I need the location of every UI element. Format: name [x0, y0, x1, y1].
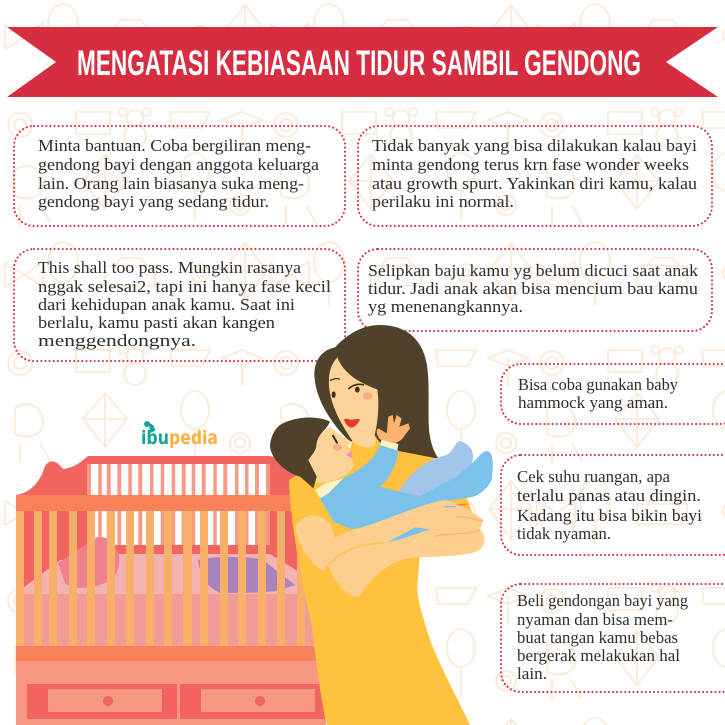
logo: ibupedia: pedia	[169, 427, 218, 449]
panel: suhu ruangan: terlalu panas atau dingin.	[517, 486, 701, 505]
logo: ibupedia: ibu	[141, 427, 169, 449]
panel: this shall too pass: dari kehidupan anak kamu. Saat ini	[38, 295, 295, 314]
baby face features	[333, 435, 352, 458]
drawer right	[180, 684, 325, 719]
panel: minta bantuan: Minta bantuan. Coba bergiliran meng-	[38, 136, 311, 155]
arm detail lines	[328, 504, 483, 565]
baby collar	[315, 478, 343, 498]
panel: suhu ruangan	[501, 455, 725, 555]
panel: selipkan baju: tidur. Jadi anak akan bisa mencium bau kamu	[368, 279, 698, 298]
drawer left	[27, 684, 177, 719]
panel: minta bantuan: gendong bayi dengan anggota keluarga	[38, 155, 320, 174]
front bars	[16, 511, 305, 646]
illustration: crib	[16, 456, 326, 725]
panel: baby hammock	[501, 364, 725, 424]
panel: this shall too pass: nggak selesai2, tapi ini hanya fase kecil	[38, 277, 331, 296]
white gap beside baby face	[325, 423, 352, 449]
baby hand	[377, 415, 410, 443]
baby face	[308, 427, 354, 483]
pillow	[58, 537, 119, 588]
baby cuff	[380, 439, 398, 450]
illustration: mother and baby	[270, 325, 493, 725]
baby hair	[270, 418, 330, 488]
panel: suhu ruangan: tidak nyaman.	[517, 524, 611, 543]
panel: this shall too pass	[14, 249, 345, 361]
panel: baby hammock: hammock yang aman.	[518, 393, 668, 412]
mother's lower arm	[328, 530, 485, 597]
panel: gendongan bayi	[501, 584, 725, 692]
panel: gendongan bayi: Beli gendongan bayi yang	[517, 591, 688, 610]
panel: minta bantuan: lain. Orang lain biasanya suka meng-	[38, 174, 304, 193]
mother's face features	[330, 379, 373, 428]
panel: wonder weeks	[358, 126, 712, 226]
panel: gendongan bayi: bergerak melakukan hal	[517, 646, 680, 665]
panel: minta bantuan	[14, 126, 345, 226]
sleeve under arm	[387, 527, 430, 543]
panel: selipkan baju	[358, 249, 712, 331]
panel: selipkan baju: yg menenangkannya.	[368, 297, 523, 316]
mattress	[23, 554, 317, 594]
panel: minta bantuan: gendong bayi yang sedang tidur.	[38, 192, 269, 211]
panel: wonder weeks: atau growth spurt. Yakinkan diri kamu, kalau	[372, 174, 697, 193]
panel: this shall too pass: menggendongnya.	[38, 331, 196, 350]
baby body	[320, 445, 493, 529]
logo: ibupedia	[141, 421, 218, 449]
panel: wonder weeks: perilaku ini normal.	[372, 192, 514, 211]
panel: this shall too pass: This shall too pass. Mungkin rasanya	[38, 258, 302, 277]
mother's upper arm	[295, 500, 483, 571]
back slats	[87, 464, 270, 545]
mother's dress	[289, 437, 477, 725]
panel: gendongan bayi: nyaman dan bisa mem-	[517, 610, 673, 629]
panel: baby hammock: Bisa coba gunakan baby	[518, 375, 679, 394]
panel: wonder weeks: Tidak banyak yang bisa dilakukan kalau bayi	[372, 136, 697, 155]
panel: suhu ruangan: Kadang itu bisa bikin bayi	[517, 506, 702, 525]
panel: suhu ruangan: Cek suhu ruangan, apa	[517, 467, 671, 486]
panel: wonder weeks: minta gendong terus krn fase wonder weeks	[372, 155, 689, 174]
blanket	[198, 557, 295, 593]
panel: gendongan bayi: buat tangan kamu bebas	[517, 628, 678, 647]
panel: selipkan baju: Selipkan baju kamu yg belum dicuci saat anak	[368, 261, 699, 280]
mother's hair	[314, 325, 438, 458]
title banner	[7, 27, 718, 97]
mother's face and neck	[329, 357, 378, 447]
baby light leg	[398, 441, 473, 496]
panel: gendongan bayi: lain.	[517, 664, 547, 683]
panel: this shall too pass: berlalu, kamu pasti akan kangen	[38, 313, 275, 332]
